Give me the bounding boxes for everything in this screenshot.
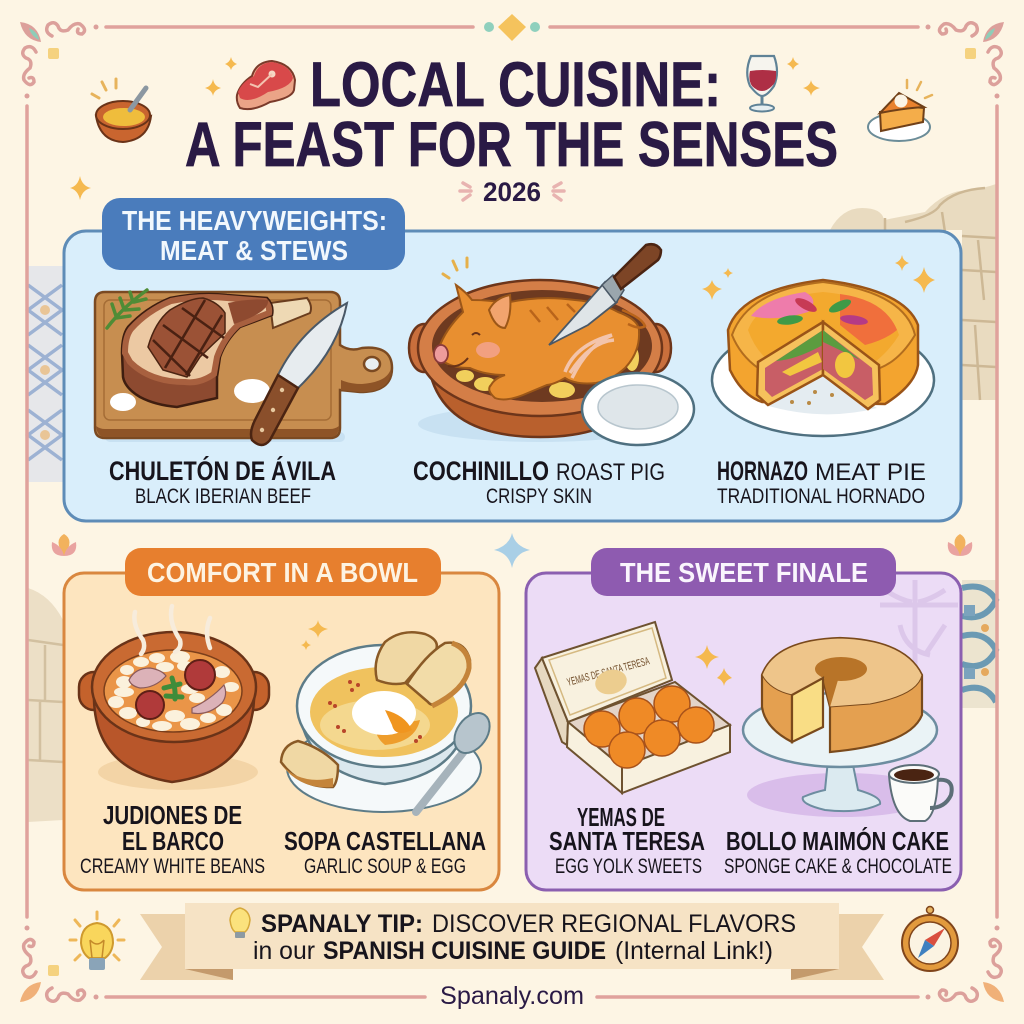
icon: small bulb	[230, 908, 250, 938]
text: bollo maimon: BOLLO MAIMÓN CAKE	[726, 826, 949, 856]
corner ornament: bottom left	[20, 926, 98, 1002]
text: bollo maimon	[724, 826, 952, 878]
text: hornazo: MEAT PIE	[815, 459, 926, 486]
year	[460, 177, 564, 207]
icon: center sparkle	[494, 533, 530, 568]
text: judiones: CREAMY WHITE BEANS	[80, 855, 265, 878]
text: judiones	[80, 800, 265, 878]
text: sopa castellana: GARLIC SOUP & EGG	[304, 855, 466, 878]
corner ornament: top right	[926, 22, 1004, 98]
icon: light bulb	[70, 912, 124, 970]
text: sopa castellana: SOPA CASTELLANA	[284, 826, 486, 856]
text: yemas: EGG YOLK SWEETS	[555, 855, 702, 878]
footer url: Spanaly.com	[440, 982, 584, 1010]
illustration: hornazo meat pie	[712, 280, 934, 436]
sparkles in heavyweights panel	[702, 255, 935, 300]
heading: the heavyweights	[102, 198, 405, 270]
illustration: box of yemas	[535, 622, 732, 793]
year: 2026	[483, 177, 541, 207]
panel: the heavyweights	[64, 198, 961, 521]
icon: lotus left	[52, 534, 76, 556]
corner ornament: top left	[20, 22, 98, 98]
panel: the sweet finale	[526, 548, 961, 890]
text: yemas: SANTA TERESA	[549, 826, 705, 856]
tip banner: DISCOVER REGIONAL FLAVORS	[432, 910, 796, 938]
text: chuleton	[109, 455, 336, 508]
background: stone wall top right	[830, 184, 996, 400]
sparkles	[70, 57, 820, 200]
panel: comfort in a bowl	[64, 548, 499, 890]
heading: the heavyweights: THE HEAVYWEIGHTS:	[122, 205, 387, 236]
text: hornazo	[717, 456, 926, 508]
illustration: coffee cup	[889, 765, 952, 821]
tip banner	[140, 903, 884, 980]
text: yemas	[549, 802, 705, 878]
text: chuleton: CHULETÓN DE ÁVILA	[109, 455, 336, 486]
lavender tile pattern	[880, 580, 958, 665]
heading: comfort in a bowl: COMFORT IN A BOWL	[147, 557, 418, 588]
text: yemas: YEMAS DE	[577, 802, 665, 832]
background: azulejo tile right	[962, 580, 996, 708]
heading: the sweet finale	[591, 548, 896, 596]
heading: the heavyweights: MEAT & STEWS	[160, 235, 348, 266]
illustration: bean stew pot	[79, 606, 269, 790]
tip banner: in our	[253, 937, 315, 965]
illustration: garlic soup with egg	[281, 620, 497, 812]
corner ornament: bottom right	[926, 926, 1004, 1002]
text: bollo maimon: SPONGE CAKE & CHOCOLATE	[724, 855, 952, 878]
tip banner: (Internal Link!)	[615, 937, 773, 965]
text: judiones: JUDIONES DE	[103, 800, 242, 830]
icon: steak	[237, 61, 295, 109]
text: chuleton: BLACK IBERIAN BEEF	[135, 485, 311, 508]
illustration: roast pig in clay dish	[409, 244, 694, 445]
title: A FEAST FOR THE SENSES	[185, 110, 838, 180]
tip banner: SPANISH CUISINE GUIDE	[323, 937, 606, 965]
icon: soup bowl	[92, 79, 151, 142]
tip banner: SPANALY TIP:	[261, 910, 423, 938]
title: LOCAL CUISINE:	[310, 50, 721, 120]
text: hornazo: HORNAZO	[717, 456, 808, 486]
icon: lotus right	[948, 534, 972, 556]
text: cochinillo: COCHINILLO	[413, 456, 549, 486]
text: sopa castellana	[284, 826, 486, 878]
icon: compass	[902, 906, 958, 971]
text: cochinillo	[413, 456, 665, 508]
illustration: box of yemas: YEMAS DE SANTA TERESA	[566, 655, 651, 689]
icon: wine glass	[747, 56, 777, 112]
text: cochinillo: CRISPY SKIN	[486, 485, 592, 508]
icon: pie slice on plate	[868, 80, 932, 141]
background: stone wall left	[28, 588, 63, 822]
heading: comfort in a bowl	[125, 548, 441, 596]
background: azulejo tile left	[28, 266, 63, 482]
illustration: bollo maimon cake on stand	[743, 638, 937, 817]
heading: the sweet finale: THE SWEET FINALE	[620, 557, 868, 588]
text: hornazo: TRADITIONAL HORNADO	[717, 485, 925, 508]
title	[185, 50, 838, 180]
text: cochinillo: ROAST PIG	[556, 459, 665, 486]
illustration: steak on cutting board	[95, 290, 392, 445]
text: judiones: EL BARCO	[122, 826, 224, 856]
